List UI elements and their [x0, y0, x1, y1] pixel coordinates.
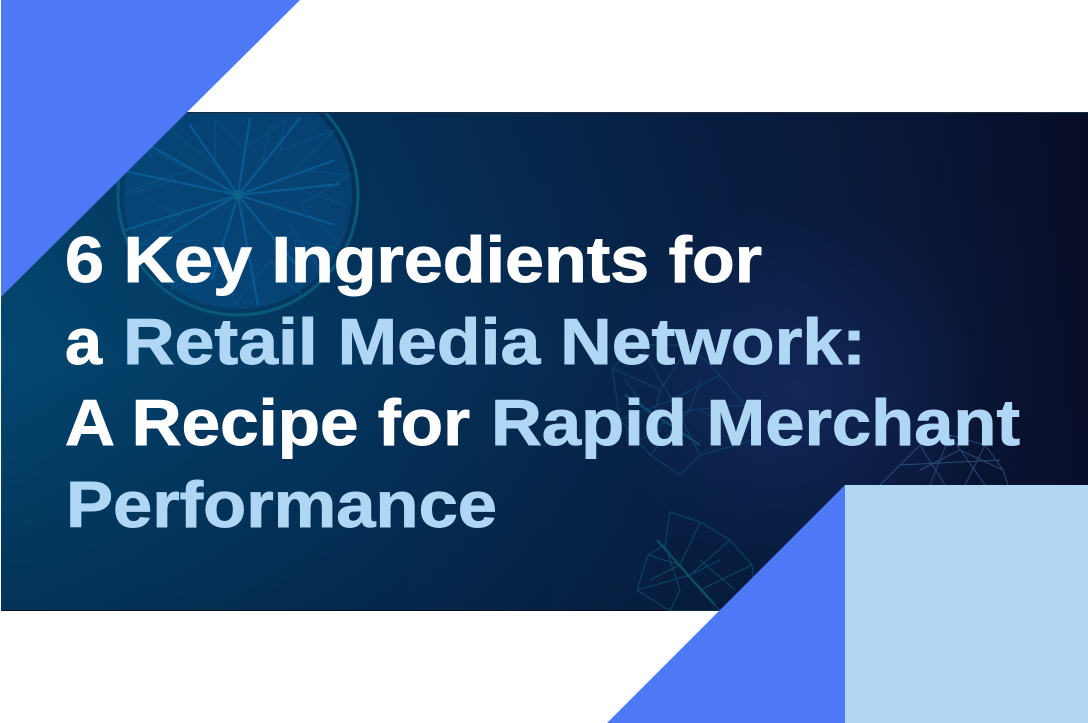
illustration: fruit mesh right	[880, 435, 1008, 485]
title: a	[65, 305, 103, 378]
title	[65, 223, 1020, 541]
decorative shape: bottom blue triangle	[607, 485, 845, 723]
title: Rapid Merchant	[491, 386, 1020, 459]
title: Retail Media Network:	[123, 305, 866, 378]
illustration: leaf mesh upper	[612, 345, 755, 475]
title: Performance	[66, 468, 497, 541]
title: A Recipe for	[65, 386, 470, 459]
decorative shape: top-left blue triangle	[1, 0, 300, 297]
title: 6 Key Ingredients for	[65, 223, 762, 296]
decorative shape: light blue square	[845, 485, 1088, 723]
illustration: citrus slice mesh	[116, 113, 360, 316]
illustration: leaf mesh lower	[637, 512, 755, 611]
dark banner background	[1, 112, 1088, 611]
